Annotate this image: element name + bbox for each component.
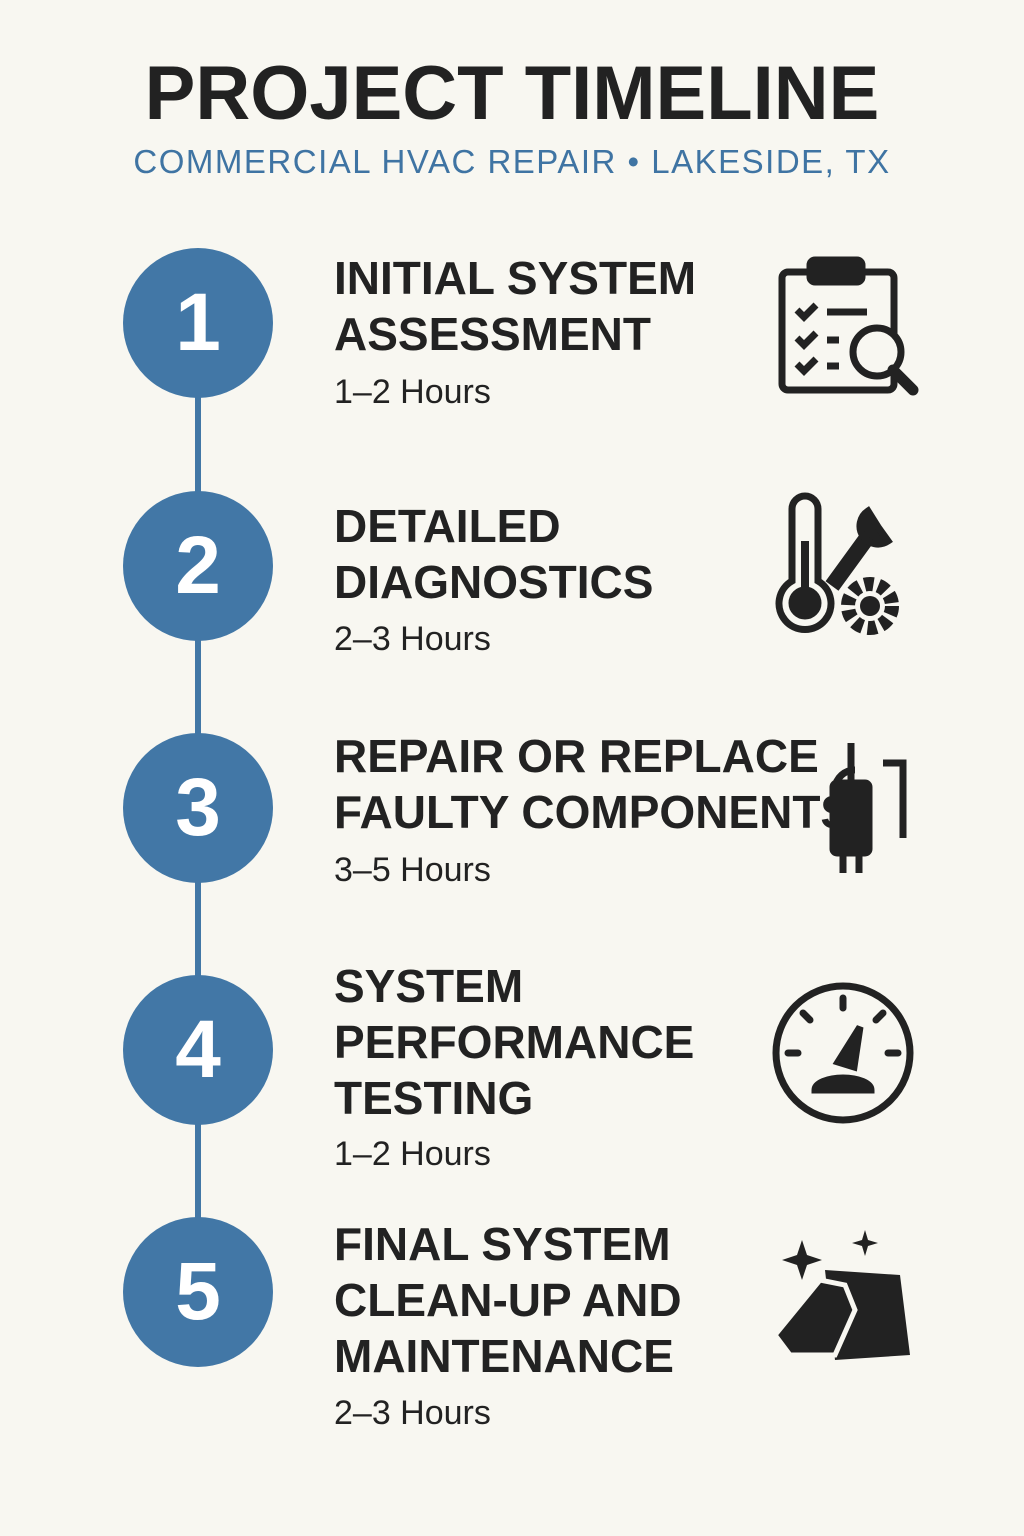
- heading 3: REPAIR OR REPLACE: [334, 730, 819, 782]
- subtitle: COMMERCIAL HVAC REPAIR • LAKESIDE, TX: [133, 143, 891, 180]
- heading 3: [334, 730, 851, 838]
- step 1: [123, 248, 918, 411]
- heading 4: PERFORMANCE: [334, 1016, 694, 1068]
- heading 4: SYSTEM: [334, 960, 523, 1012]
- duration 1: 1–2 Hours: [334, 373, 491, 411]
- title: PROJECT TIMELINE: [145, 51, 879, 136]
- circle 4: [123, 975, 273, 1125]
- circle 3: 3: [175, 762, 221, 853]
- step 2: [123, 491, 899, 658]
- heading 1: INITIAL SYSTEM: [334, 252, 696, 304]
- circle 4: 4: [175, 1004, 221, 1095]
- circle 1: [123, 248, 273, 398]
- duration 2: 2–3 Hours: [334, 620, 491, 658]
- heading 1: [334, 252, 696, 360]
- duration 3: 3–5 Hours: [334, 851, 491, 889]
- icon: component: [830, 743, 906, 873]
- circle 5: 5: [175, 1246, 221, 1337]
- heading 2: DETAILED: [334, 500, 561, 552]
- heading 5: MAINTENANCE: [334, 1330, 674, 1382]
- heading 2: DIAGNOSTICS: [334, 556, 653, 608]
- icon: thermometer and wrench: [776, 492, 899, 635]
- heading 3: FAULTY COMPONENTS: [334, 786, 851, 838]
- duration 5: 2–3 Hours: [334, 1394, 491, 1432]
- heading 5: CLEAN-UP AND: [334, 1274, 682, 1326]
- heading 4: [334, 960, 694, 1124]
- step 4: [123, 960, 914, 1173]
- icon: cleaning hand: [778, 1230, 910, 1360]
- circle 1: 1: [175, 277, 221, 368]
- circle 5: [123, 1217, 273, 1367]
- circle 2: 2: [175, 520, 221, 611]
- icon: clipboard: [778, 256, 918, 396]
- heading 5: FINAL SYSTEM: [334, 1218, 671, 1270]
- heading 4: TESTING: [334, 1072, 533, 1124]
- heading 2: [334, 500, 653, 608]
- step 3: [123, 730, 906, 889]
- step 5: [123, 1217, 910, 1432]
- heading 1: ASSESSMENT: [334, 308, 651, 360]
- circle 2: [123, 491, 273, 641]
- circle 3: [123, 733, 273, 883]
- heading 5: [334, 1218, 682, 1382]
- timeline line: [195, 323, 201, 1293]
- icon: gauge: [772, 982, 914, 1124]
- duration 4: 1–2 Hours: [334, 1135, 491, 1173]
